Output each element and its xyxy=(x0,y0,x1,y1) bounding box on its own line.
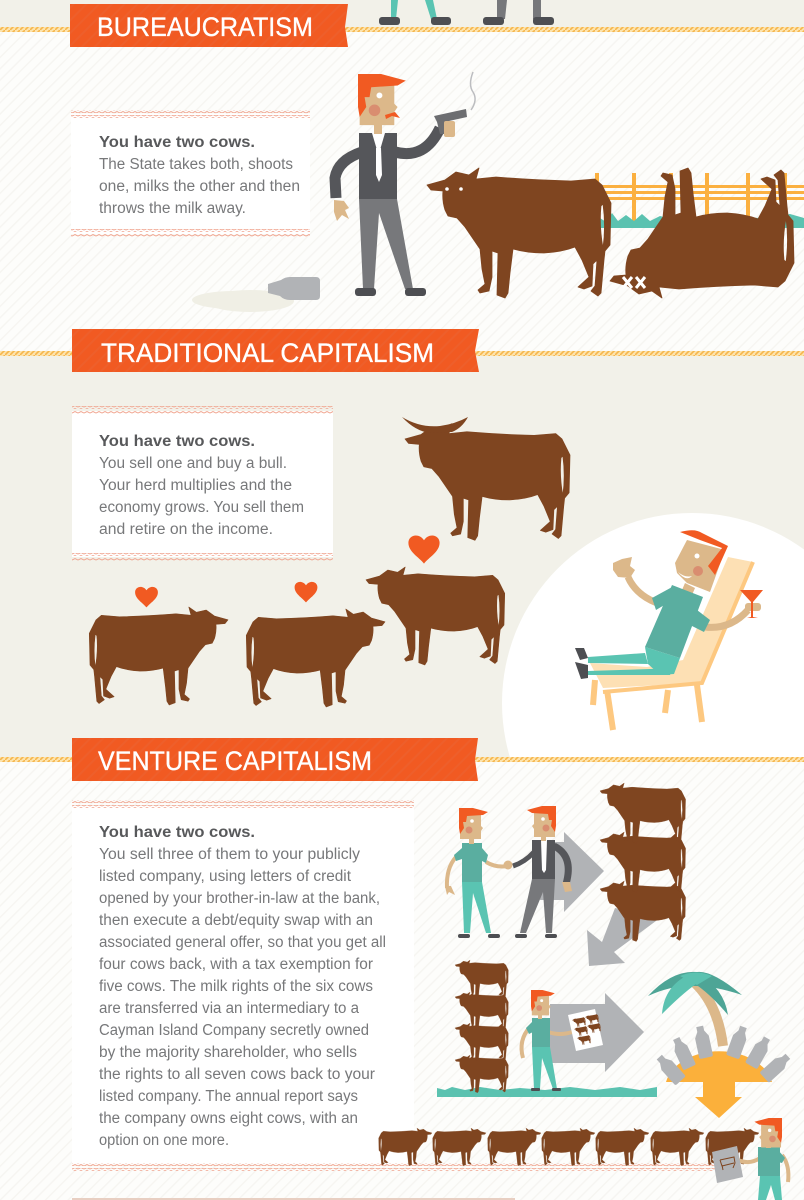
panel: traditional capitalism text: economy grows. You sell them xyxy=(99,499,304,516)
panel: traditional capitalism text xyxy=(72,406,333,561)
panel: venture capitalism text: the rights to all seven cows back to your xyxy=(99,1066,375,1083)
panel: venture capitalism text: by the majority shareholder, who sells xyxy=(99,1044,357,1061)
banner: Venture Capitalism: VENTURE CAPITALISM xyxy=(98,746,372,776)
figure: man with one-cow sheet xyxy=(712,1118,788,1200)
panel: bureaucratism text: one, milks the other and then xyxy=(99,178,300,195)
panel: traditional capitalism text: You sell one and buy a bull. xyxy=(99,455,287,472)
figure: man presenting cow sheet xyxy=(522,990,572,1091)
panel: venture capitalism text: listed company. The annual report says xyxy=(99,1088,358,1105)
panel: venture capitalism text: the company owns eight cows, with an xyxy=(99,1110,358,1127)
icon: milk bottle xyxy=(268,277,320,300)
banner: Traditional Capitalism: TRADITIONAL CAPITALISM xyxy=(101,338,434,368)
panel: bureaucratism text: throws the milk away. xyxy=(99,200,246,217)
panel: bureaucratism text: You have two cows. xyxy=(99,134,255,151)
cow: standing xyxy=(427,168,611,298)
panel: venture capitalism text: You have two cows. xyxy=(99,824,255,841)
palm tree island with bottles xyxy=(648,972,793,1118)
panel: venture capitalism text: five cows. The milk rights of the six cows xyxy=(99,978,373,995)
banner: Bureaucratism xyxy=(70,4,348,47)
panel: traditional capitalism text: and retire on the income. xyxy=(99,521,273,538)
figure: man on deck chair with cocktail xyxy=(575,530,763,730)
grass strip xyxy=(437,1087,657,1097)
panel: venture capitalism text: are transferred via an intermediary to a xyxy=(99,1000,359,1017)
panel: venture capitalism text: You sell three of them to your publicly xyxy=(99,846,360,863)
sheet showing five cows xyxy=(568,1009,603,1051)
panel: bureaucratism text xyxy=(71,110,310,237)
cow with heart 2 xyxy=(246,582,385,707)
fence and grass xyxy=(595,173,804,228)
cows: row of seven xyxy=(379,1128,759,1166)
panel: venture capitalism text xyxy=(72,800,722,1171)
arrow: grey large right xyxy=(550,993,644,1072)
cows: stack of four xyxy=(455,960,508,1093)
banner: Traditional Capitalism xyxy=(72,329,479,372)
banner: Bureaucratism: BUREAUCRATISM xyxy=(97,12,313,42)
panel: traditional capitalism text: You have two cows. xyxy=(99,433,255,450)
cows: stack of three xyxy=(600,783,686,941)
arrow: grey diagonal down-left xyxy=(587,908,660,966)
panel: venture capitalism text: associated general offer, so that you get all xyxy=(99,934,386,951)
cow with heart 1 xyxy=(89,587,228,705)
panel: bureaucratism text: The State takes both, shoots xyxy=(99,156,293,173)
panel: venture capitalism text: Cayman Island Company secretly owned xyxy=(99,1022,369,1039)
arrow: grey right xyxy=(540,832,604,912)
panel: venture capitalism text: four cows back, with a tax exemption for xyxy=(99,956,373,973)
panel: venture capitalism text: option on one more. xyxy=(99,1132,229,1149)
cow: shot, upside down xyxy=(610,168,794,298)
figure: man in shirt shaking hands xyxy=(445,808,512,938)
panel: venture capitalism text: listed company, using letters of credit xyxy=(99,868,352,885)
legs of figures from previous section xyxy=(379,0,554,25)
panel: traditional capitalism text: Your herd multiplies and the xyxy=(99,477,292,494)
spilled milk puddle xyxy=(192,290,294,312)
figure: businessman shaking hands xyxy=(513,806,572,938)
panel: venture capitalism text: opened by your brother-in-law at the bank, xyxy=(99,890,380,907)
figure: bureaucrat with gun xyxy=(334,72,475,296)
cow with heart 3 xyxy=(366,535,505,665)
banner: Venture Capitalism xyxy=(72,738,478,781)
panel: venture capitalism text: then execute a debt/equity swap with an xyxy=(99,912,373,929)
bull xyxy=(402,417,570,540)
